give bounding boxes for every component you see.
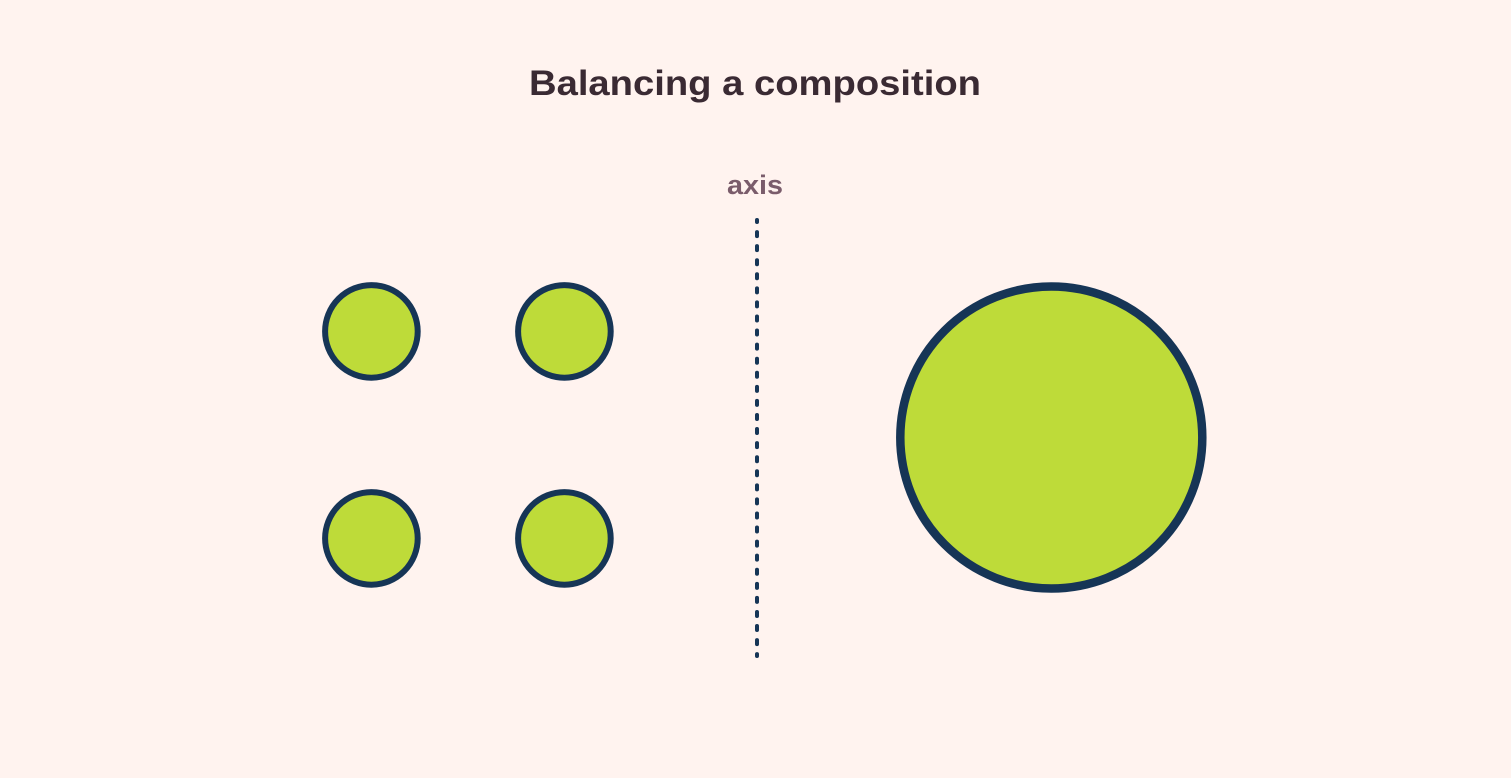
small circle: top left [325,285,418,378]
small circle: top right [518,285,611,378]
group: four small circles [325,285,611,585]
axis label: axis [727,170,783,200]
title: Balancing a composition [529,64,981,103]
small circle: bottom left [325,492,418,585]
small circle: bottom right [518,492,611,585]
axis: dotted vertical line [755,220,759,656]
large circle [900,286,1202,588]
